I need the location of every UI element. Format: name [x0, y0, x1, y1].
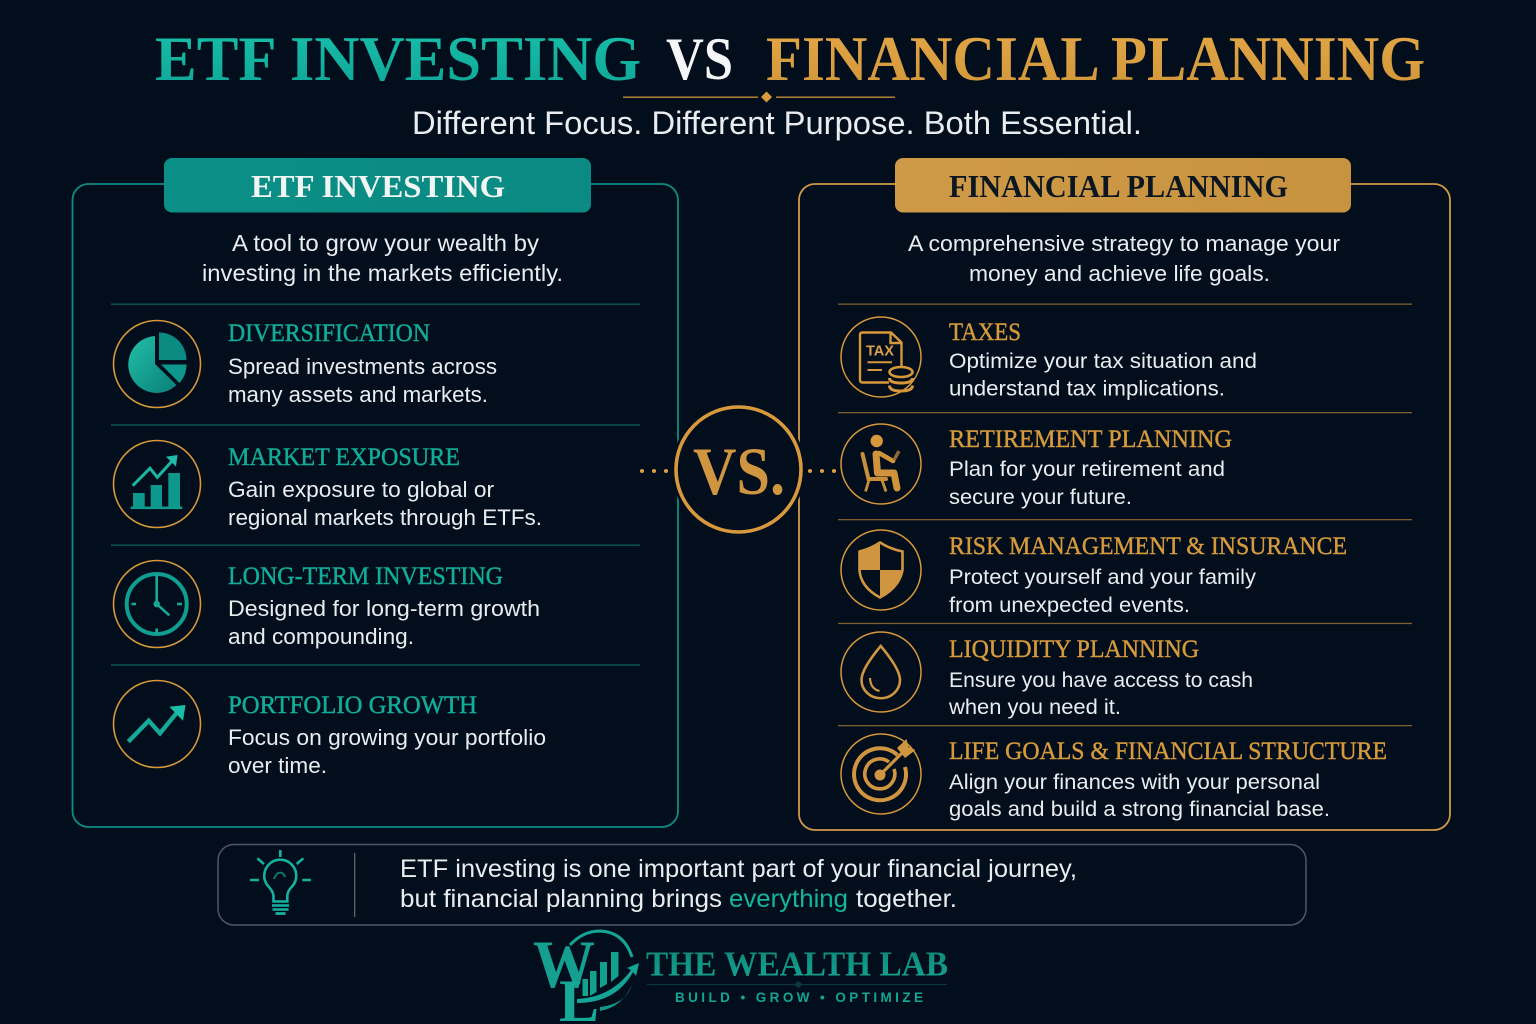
item: retirement planning: RETIREMENT PLANNING [949, 424, 1232, 453]
item: life goals: Align your finances with your personal [949, 770, 1320, 794]
icon: bar chart with arrow [114, 440, 200, 528]
left panel description: A tool to grow your wealth by [232, 230, 539, 256]
item: diversification: Spread investments across [228, 354, 497, 379]
right panel description [908, 231, 1341, 286]
left panel description [202, 230, 563, 286]
callout text: everything [729, 885, 848, 913]
item: taxes: TAXES [949, 317, 1021, 346]
item: long-term investing: LONG-TERM INVESTING [228, 561, 503, 590]
item: taxes: Optimize your tax situation and [949, 349, 1257, 373]
left panel description: investing in the markets efficiently. [202, 260, 563, 286]
item: market exposure: Gain exposure to global or [228, 477, 495, 502]
right panel header: FINANCIAL PLANNING [949, 169, 1288, 204]
panel: financial planning [799, 158, 1450, 830]
item: market exposure [114, 440, 542, 530]
logo: The Wealth Lab [533, 926, 948, 1024]
left panel border [72, 184, 678, 827]
item: diversification: DIVERSIFICATION [228, 318, 430, 347]
item: taxes [841, 317, 1257, 400]
item: diversification [114, 318, 497, 408]
icon: tax document and coins [841, 317, 921, 397]
item: risk management: Protect yourself and your family [949, 565, 1256, 589]
right panel description: A comprehensive strategy to manage your [908, 231, 1341, 256]
icon: light bulb [250, 850, 311, 914]
icon: growth arrow [114, 680, 200, 768]
title divider [623, 92, 895, 102]
item: portfolio growth: PORTFOLIO GROWTH [228, 690, 477, 719]
item: liquidity planning: LIQUIDITY PLANNING [949, 634, 1199, 663]
VS badge [640, 402, 836, 536]
item: diversification: many assets and markets. [228, 382, 488, 407]
item: risk management [841, 530, 1347, 617]
left panel header [164, 158, 591, 212]
icon: seated person [841, 424, 921, 504]
item: liquidity planning: when you need it. [948, 695, 1121, 719]
right panel description: money and achieve life goals. [969, 261, 1270, 286]
icon: shield [841, 530, 921, 610]
item: long-term investing: and compounding. [228, 624, 414, 649]
icon: clock [114, 560, 200, 648]
item: liquidity planning [841, 632, 1253, 719]
item: retirement planning: secure your future. [949, 485, 1132, 509]
subtitle: Different Focus. Different Purpose. Both Essential. [412, 105, 1142, 141]
callout text: ETF investing is one important part of your financial journey, [400, 855, 1077, 883]
title: ETF INVESTING [155, 24, 641, 94]
title [155, 24, 1425, 94]
item: risk management: RISK MANAGEMENT & INSURANCE [949, 531, 1347, 560]
item: portfolio growth: Focus on growing your portfolio [228, 725, 546, 750]
callout text: but financial planning brings [400, 885, 722, 913]
callout text [400, 855, 1077, 913]
item: retirement planning [841, 424, 1232, 509]
title: VS [666, 26, 733, 92]
icon: pie chart [114, 320, 200, 408]
logo mark: W [533, 926, 595, 1002]
item: risk management: from unexpected events. [949, 593, 1190, 617]
callout: key takeaway [218, 844, 1306, 925]
item: long-term investing [114, 560, 540, 649]
item: liquidity planning: Ensure you have access to cash [949, 668, 1253, 692]
callout text: together. [856, 885, 957, 913]
item: life goals: goals and build a strong financial base. [949, 797, 1330, 821]
item: market exposure: regional markets through ETFs. [228, 505, 542, 530]
VS badge: VS. [693, 433, 785, 509]
item: portfolio growth: over time. [228, 753, 327, 778]
item: market exposure: MARKET EXPOSURE [228, 442, 460, 471]
item: life goals: LIFE GOALS & FINANCIAL STRUCTURE [949, 736, 1387, 765]
item: life goals [841, 734, 1387, 821]
right panel border [799, 184, 1450, 830]
item: portfolio growth [114, 680, 546, 778]
icon: target and arrow [841, 734, 921, 814]
left panel header: ETF INVESTING [251, 168, 505, 204]
right panel header [895, 158, 1351, 212]
item: long-term investing: Designed for long-term growth [228, 596, 540, 621]
title: FINANCIAL PLANNING [766, 24, 1425, 94]
icon: water drop [841, 632, 921, 712]
icon: tax document and coins: TAX [866, 342, 894, 360]
panel: ETF investing [72, 158, 678, 827]
item: retirement planning: Plan for your retirement and [949, 457, 1225, 481]
item: taxes: understand tax implications. [949, 376, 1225, 400]
logo mark [533, 926, 639, 1024]
logo: The Wealth Lab: BUILD • GROW • OPTIMIZE [675, 990, 923, 1005]
logo: The Wealth Lab: THE WEALTH LAB [646, 944, 948, 984]
